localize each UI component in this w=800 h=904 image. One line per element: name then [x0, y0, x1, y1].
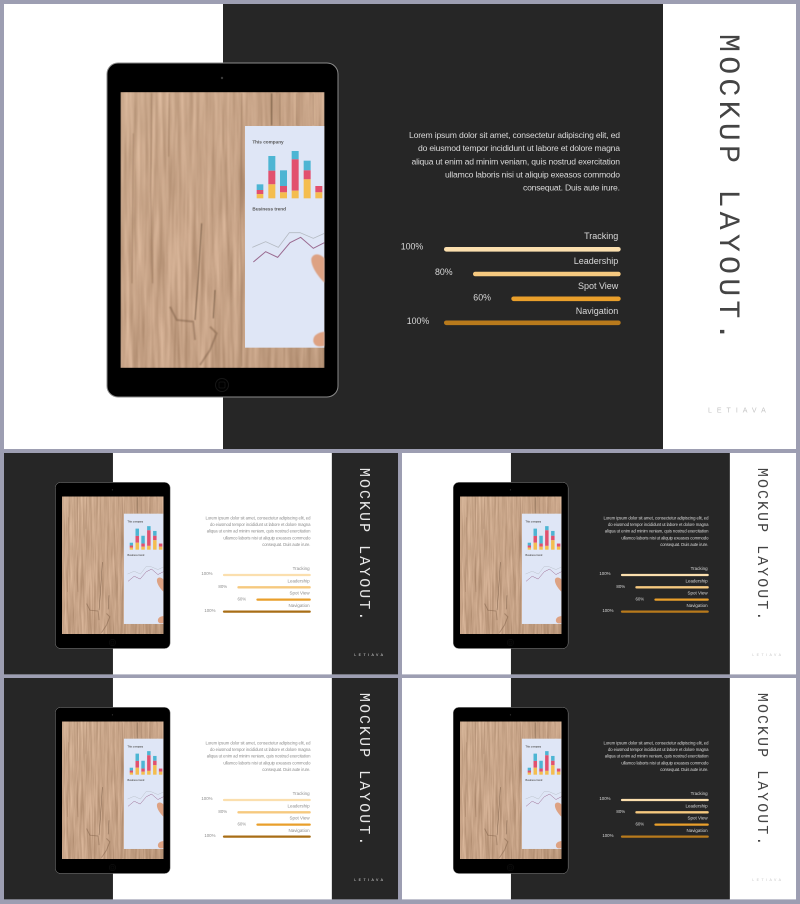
- body paragraph: consequat. Duis aute irure.: [262, 542, 310, 547]
- skill bars: Leadership: [287, 803, 310, 808]
- skill bars: Spot View: [290, 591, 310, 596]
- body paragraph: Lorem ipsum dolor sit amet, consectetur adipiscing elit, ed: [603, 741, 709, 746]
- skill bars: 100%: [401, 242, 423, 252]
- body paragraph: consequat. Duis aute irure.: [660, 767, 708, 772]
- body paragraph: consequat. Duis aute irure.: [262, 767, 310, 772]
- slide white base: [402, 678, 796, 899]
- body paragraph: ullamco laboris nisi ut aliquip exeasos commodo: [223, 760, 311, 765]
- body paragraph: ullamco laboris nisi ut aliquip exeasos commodo: [223, 535, 311, 540]
- skill bars: Navigation: [288, 828, 310, 833]
- skill bars: 100%: [201, 796, 213, 801]
- body paragraph: do eiusmod tempor incididunt ut labore et dolore magna: [210, 522, 311, 527]
- body paragraph: [205, 516, 311, 547]
- vertical title: MOCKUP LAYOUT.: [753, 693, 769, 847]
- body paragraph: do eiusmod tempor incididunt ut labore et dolore magna: [608, 747, 709, 752]
- panel: light-side variant, row 3 right: [402, 678, 796, 899]
- dark left band: [4, 678, 113, 899]
- slide white base: [4, 4, 796, 449]
- brand: LETIAVA: [752, 653, 783, 657]
- tablet mockup: [55, 482, 170, 649]
- body paragraph: [603, 516, 709, 547]
- skill bars: 80%: [616, 584, 625, 589]
- brand: LETIAVA: [708, 408, 771, 414]
- body paragraph: consequat. Duis aute irure.: [523, 183, 620, 193]
- slide white base: [4, 453, 398, 674]
- skill bars: 100%: [204, 608, 216, 613]
- body paragraph: do eiusmod tempor incididunt ut labore et dolore magna: [608, 522, 709, 527]
- skill bars: 60%: [237, 822, 246, 827]
- skill bars: [401, 231, 621, 326]
- body paragraph: Lorem ipsum dolor sit amet, consectetur adipiscing elit, ed: [205, 516, 311, 521]
- skill bars: Tracking: [691, 566, 708, 571]
- skill bars: Leadership: [685, 578, 708, 583]
- panel: main slide: [4, 4, 796, 449]
- body paragraph: [205, 741, 311, 772]
- brand: LETIAVA: [354, 653, 385, 657]
- tablet mockup: [107, 63, 338, 397]
- skill bars: Leadership: [287, 578, 310, 583]
- skill bars: Spot View: [688, 816, 708, 821]
- body paragraph: Lorem ipsum dolor sit amet, consectetur adipiscing elit, ed: [205, 741, 311, 746]
- skill bars: 80%: [435, 267, 453, 277]
- skill bars: Tracking: [293, 566, 310, 571]
- skill bars: Navigation: [686, 603, 708, 608]
- body paragraph: [603, 741, 709, 772]
- tablet mockup: [55, 707, 170, 874]
- skill bars: 60%: [635, 822, 644, 827]
- panel: light-side variant, row 2 right: [402, 453, 796, 674]
- skill bars: Navigation: [686, 828, 708, 833]
- skill bars: Tracking: [584, 231, 618, 241]
- body paragraph: aliqua ut enim ad minim veniam, quis nostrud exercitation: [605, 754, 709, 759]
- dark right band: [332, 678, 398, 899]
- dark centre band: [511, 453, 730, 674]
- dark centre band: [511, 678, 730, 899]
- skill bars: Spot View: [688, 591, 708, 596]
- brand: LETIAVA: [354, 878, 385, 882]
- slide white base: [4, 678, 398, 899]
- skill bars: Leadership: [685, 803, 708, 808]
- skill bars: [201, 566, 311, 613]
- skill bars: [599, 566, 709, 613]
- dark left band: [4, 453, 113, 674]
- skill bars: 100%: [599, 796, 611, 801]
- dark centre band: [223, 4, 663, 449]
- body paragraph: ullamco laboris nisi ut aliquip exeasos commodo: [621, 760, 709, 765]
- skill bars: 60%: [473, 292, 491, 302]
- skill bars: 100%: [599, 571, 611, 576]
- body paragraph: aliqua ut enim ad minim veniam, quis nostrud exercitation: [207, 529, 311, 534]
- skill bars: 100%: [204, 833, 216, 838]
- skill bars: Navigation: [576, 306, 618, 316]
- skill bars: Leadership: [574, 256, 618, 266]
- vertical title: MOCKUP LAYOUT.: [710, 34, 744, 345]
- skill bars: Tracking: [691, 791, 708, 796]
- skill bars: Navigation: [288, 603, 310, 608]
- skill bars: 100%: [407, 316, 429, 326]
- panel: dark-side variant, row 3 left: [4, 678, 398, 899]
- skill bars: [599, 791, 709, 838]
- vertical title: MOCKUP LAYOUT.: [355, 693, 371, 847]
- skill bars: [201, 791, 311, 838]
- skill bars: Spot View: [578, 281, 619, 291]
- body paragraph: ullamco laboris nisi ut aliquip exeasos commodo: [621, 535, 709, 540]
- brand: LETIAVA: [752, 878, 783, 882]
- body paragraph: do eiusmod tempor incididunt ut labore et dolore magna: [210, 747, 311, 752]
- tablet mockup: [453, 707, 568, 874]
- skill bars: 80%: [616, 809, 625, 814]
- body paragraph: aliqua ut enim ad minim veniam, quis nostrud exercitation: [207, 754, 311, 759]
- skill bars: 80%: [218, 584, 227, 589]
- skill bars: Tracking: [293, 791, 310, 796]
- dark right band: [332, 453, 398, 674]
- body paragraph: Lorem ipsum dolor sit amet, consectetur adipiscing elit, ed: [603, 516, 709, 521]
- skill bars: 60%: [635, 597, 644, 602]
- skill bars: 100%: [602, 608, 614, 613]
- vertical title: MOCKUP LAYOUT.: [753, 468, 769, 622]
- skill bars: 100%: [201, 571, 213, 576]
- body paragraph: [409, 130, 620, 193]
- body paragraph: do eiusmod tempor incididunt ut labore et dolore magna: [418, 143, 620, 153]
- body paragraph: aliqua ut enim ad minim veniam, quis nostrud exercitation: [605, 529, 709, 534]
- body paragraph: aliqua ut enim ad minim veniam, quis nostrud exercitation: [412, 156, 620, 166]
- body paragraph: consequat. Duis aute irure.: [660, 542, 708, 547]
- skill bars: 80%: [218, 809, 227, 814]
- panel: dark-side variant, row 2 left: [4, 453, 398, 674]
- body paragraph: Lorem ipsum dolor sit amet, consectetur adipiscing elit, ed: [409, 130, 620, 140]
- skill bars: Spot View: [290, 816, 310, 821]
- skill bars: 60%: [237, 597, 246, 602]
- vertical title: MOCKUP LAYOUT.: [355, 468, 371, 622]
- body paragraph: ullamco laboris nisi ut aliquip exeasos commodo: [445, 170, 620, 180]
- slide white base: [402, 453, 796, 674]
- skill bars: 100%: [602, 833, 614, 838]
- tablet mockup: [453, 482, 568, 649]
